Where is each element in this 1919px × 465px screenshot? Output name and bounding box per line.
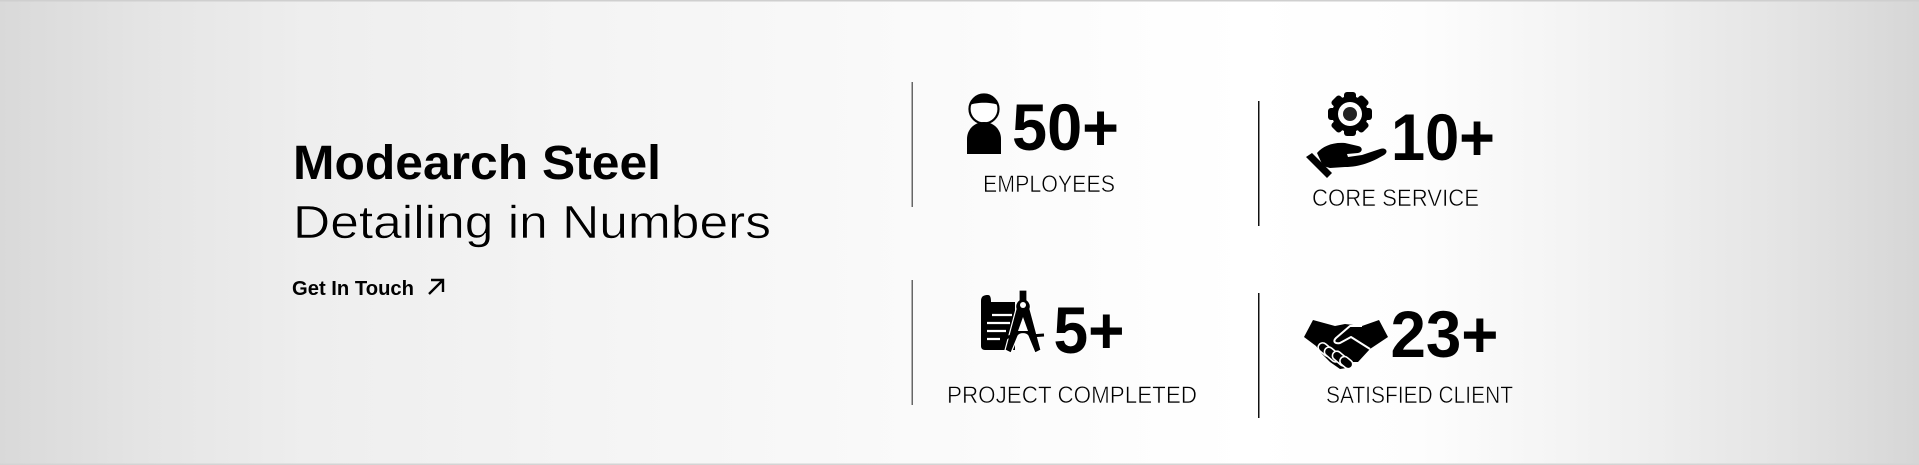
label: EMPLOYEES: EMPLOYEES: [983, 171, 1115, 198]
stat: project completed: [912, 280, 1197, 409]
title: Modearch Steel: Modearch Steel: [293, 137, 661, 190]
link: Get In Touch: Get In Touch: [292, 278, 414, 300]
stat: satisfied client: [1258, 293, 1513, 418]
subtitle: Detailing in Numbers: Detailing in Numbers: [293, 196, 771, 248]
stat: core service: [1258, 92, 1495, 226]
heading block: [293, 137, 771, 248]
icon: arrow up-right: [429, 280, 443, 294]
number: 50+: 50+: [1012, 90, 1119, 164]
label: SATISFIED CLIENT: SATISFIED CLIENT: [1326, 382, 1513, 409]
icon: person: [967, 94, 1001, 154]
number: 5+: 5+: [1054, 293, 1124, 367]
icon: handshake: [1304, 320, 1388, 371]
stat: employees: [912, 82, 1119, 207]
icon: hand with gear: [1306, 92, 1387, 178]
number: 23+: 23+: [1390, 297, 1498, 371]
label: CORE SERVICE: CORE SERVICE: [1312, 185, 1479, 212]
label: PROJECT COMPLETED: PROJECT COMPLETED: [947, 382, 1197, 409]
number: 10+: 10+: [1391, 100, 1495, 174]
icon: blueprint and compass: [981, 290, 1044, 353]
